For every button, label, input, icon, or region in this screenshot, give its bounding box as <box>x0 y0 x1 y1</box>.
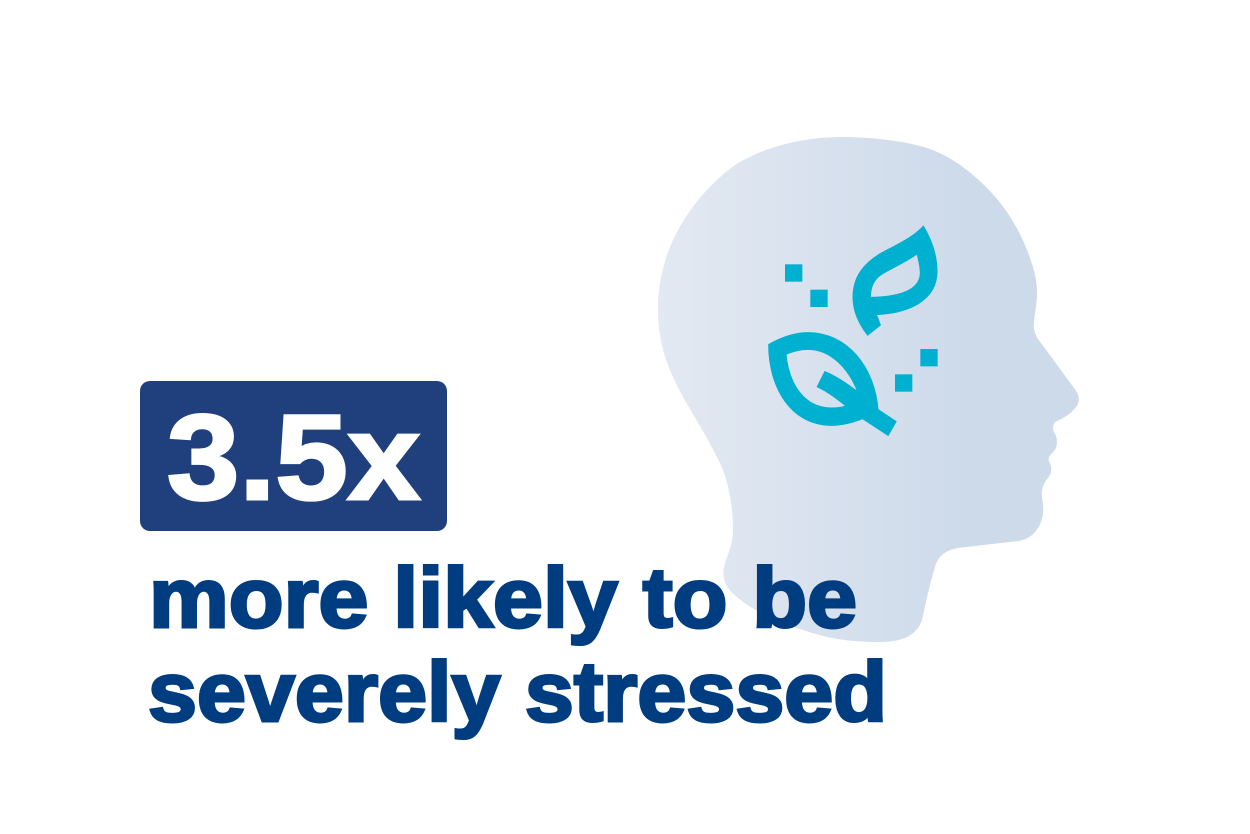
icon: particle squares <box>785 264 938 392</box>
heading: more likely to be severely stressed: more likely to be <box>149 551 857 645</box>
heading: more likely to be severely stressed: severely stressed <box>148 645 887 739</box>
callout: 3.5x badge <box>140 381 447 531</box>
callout: 3.5x badge: 3.5x <box>167 389 420 525</box>
icon: head silhouette <box>658 137 1079 642</box>
heading: more likely to be severely stressed <box>148 551 887 739</box>
icon: lower leaf <box>769 333 896 435</box>
icon: upper leaf <box>853 227 937 335</box>
icon: leaves and particles <box>769 227 938 435</box>
